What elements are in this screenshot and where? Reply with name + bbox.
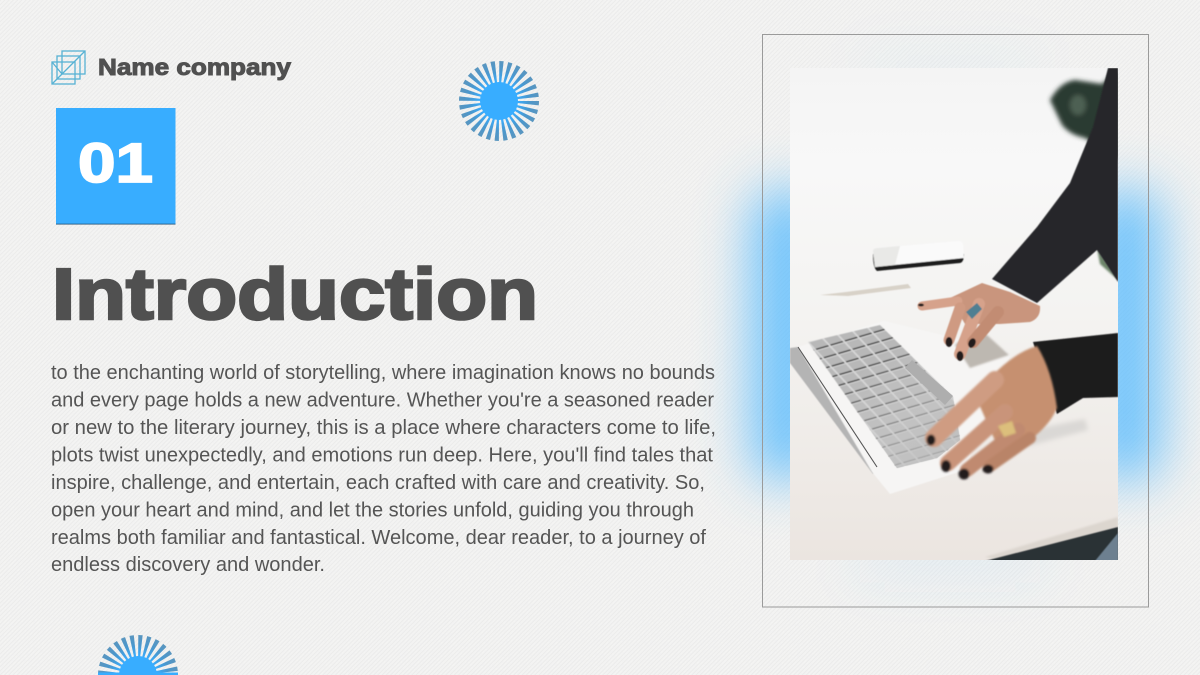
company name: Name company [98,54,291,80]
pencil [820,284,911,296]
sunburst icon: bottom, cropped by slide edge [98,647,178,675]
body paragraph: to the enchanting world of storytelling, where imagination knows no bounds [51,362,715,384]
dark sleeve lower arm [1033,333,1118,414]
body paragraph: and every page holds a new adventure. Whether you're a seasoned reader [51,390,714,412]
blurred plant [1050,70,1118,160]
logo icon: nested squares [52,51,85,84]
body paragraph: or new to the literary journey, this is a place where characters come to life, [51,417,716,439]
laptop base [799,348,984,494]
trackpad [955,330,1009,368]
section number: 01 [78,131,153,194]
table edge and legs [985,517,1118,561]
body paragraph: inspire, challenge, and entertain, each crafted with care and creativity. So, [51,472,705,494]
dark sleeve upper arm [992,68,1118,303]
keyboard highlight [848,354,960,468]
heading: Introduction [52,255,538,335]
green leaf behind sleeve [1096,250,1116,280]
blue glow behind photo [752,58,1160,570]
upper hand with ring [918,283,1040,361]
thin photo frame [762,34,1148,607]
body paragraph [51,362,716,576]
photo backdrop and table [790,68,1118,560]
silver pen under hand [1032,419,1088,445]
laptop [790,321,1010,494]
phone [872,246,964,272]
keyboard [808,325,960,468]
lower hand with ring [926,346,1057,480]
sunburst icon: top [471,73,527,129]
body paragraph: open your heart and mind, and let the stories unfold, guiding you through [51,500,694,522]
photo: hands typing on a laptop [790,68,1118,561]
section number badge [56,108,176,224]
body paragraph: realms both familiar and fantastical. Welcome, dear reader, to a journey of [51,527,706,549]
laptop hinge [790,347,878,474]
spacebar strip [905,360,953,405]
hinge shadow line [798,347,877,467]
body paragraph: plots twist unexpectedly, and emotions run deep. Here, you'll find tales that [51,444,713,466]
body paragraph: endless discovery and wonder. [51,554,325,576]
